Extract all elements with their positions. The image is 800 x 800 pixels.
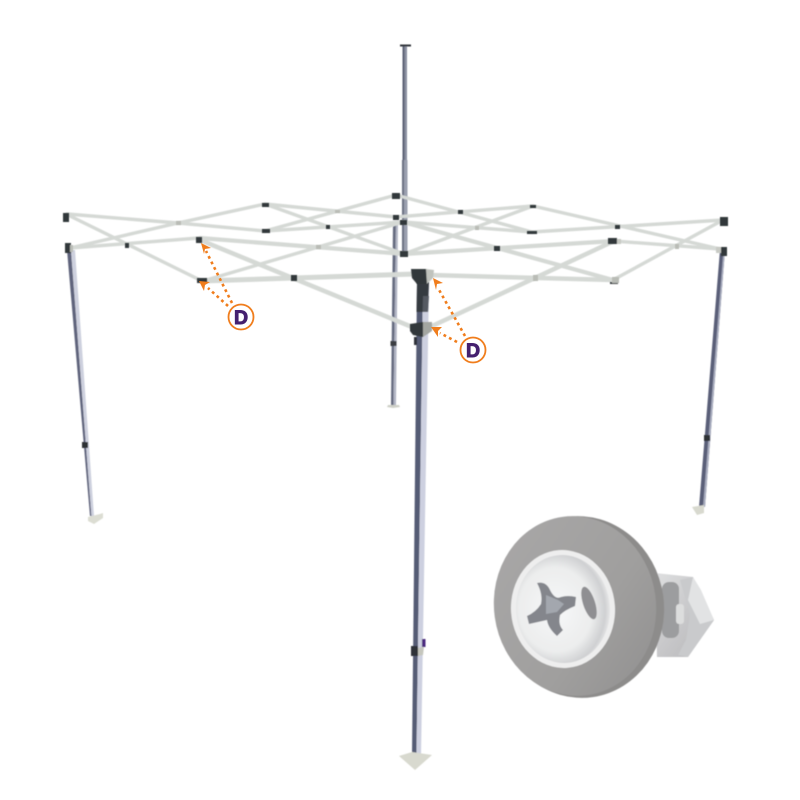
callout D left (199, 243, 254, 330)
left pole (67, 250, 103, 524)
badge D right: D (466, 340, 480, 362)
badge D left: D (234, 307, 248, 329)
back pole with mast (387, 44, 411, 408)
roof truss bars (67, 195, 723, 327)
callout D right (431, 278, 486, 362)
arrows to left connectors (199, 243, 232, 306)
screw head (507, 547, 619, 671)
bolt photo illustration (482, 505, 714, 709)
roof connectors (63, 193, 728, 337)
nut and shank (655, 573, 714, 657)
rubber washer (482, 505, 676, 709)
arrows to front connectors (431, 278, 465, 342)
front pole (399, 282, 432, 770)
right pole (692, 250, 725, 515)
